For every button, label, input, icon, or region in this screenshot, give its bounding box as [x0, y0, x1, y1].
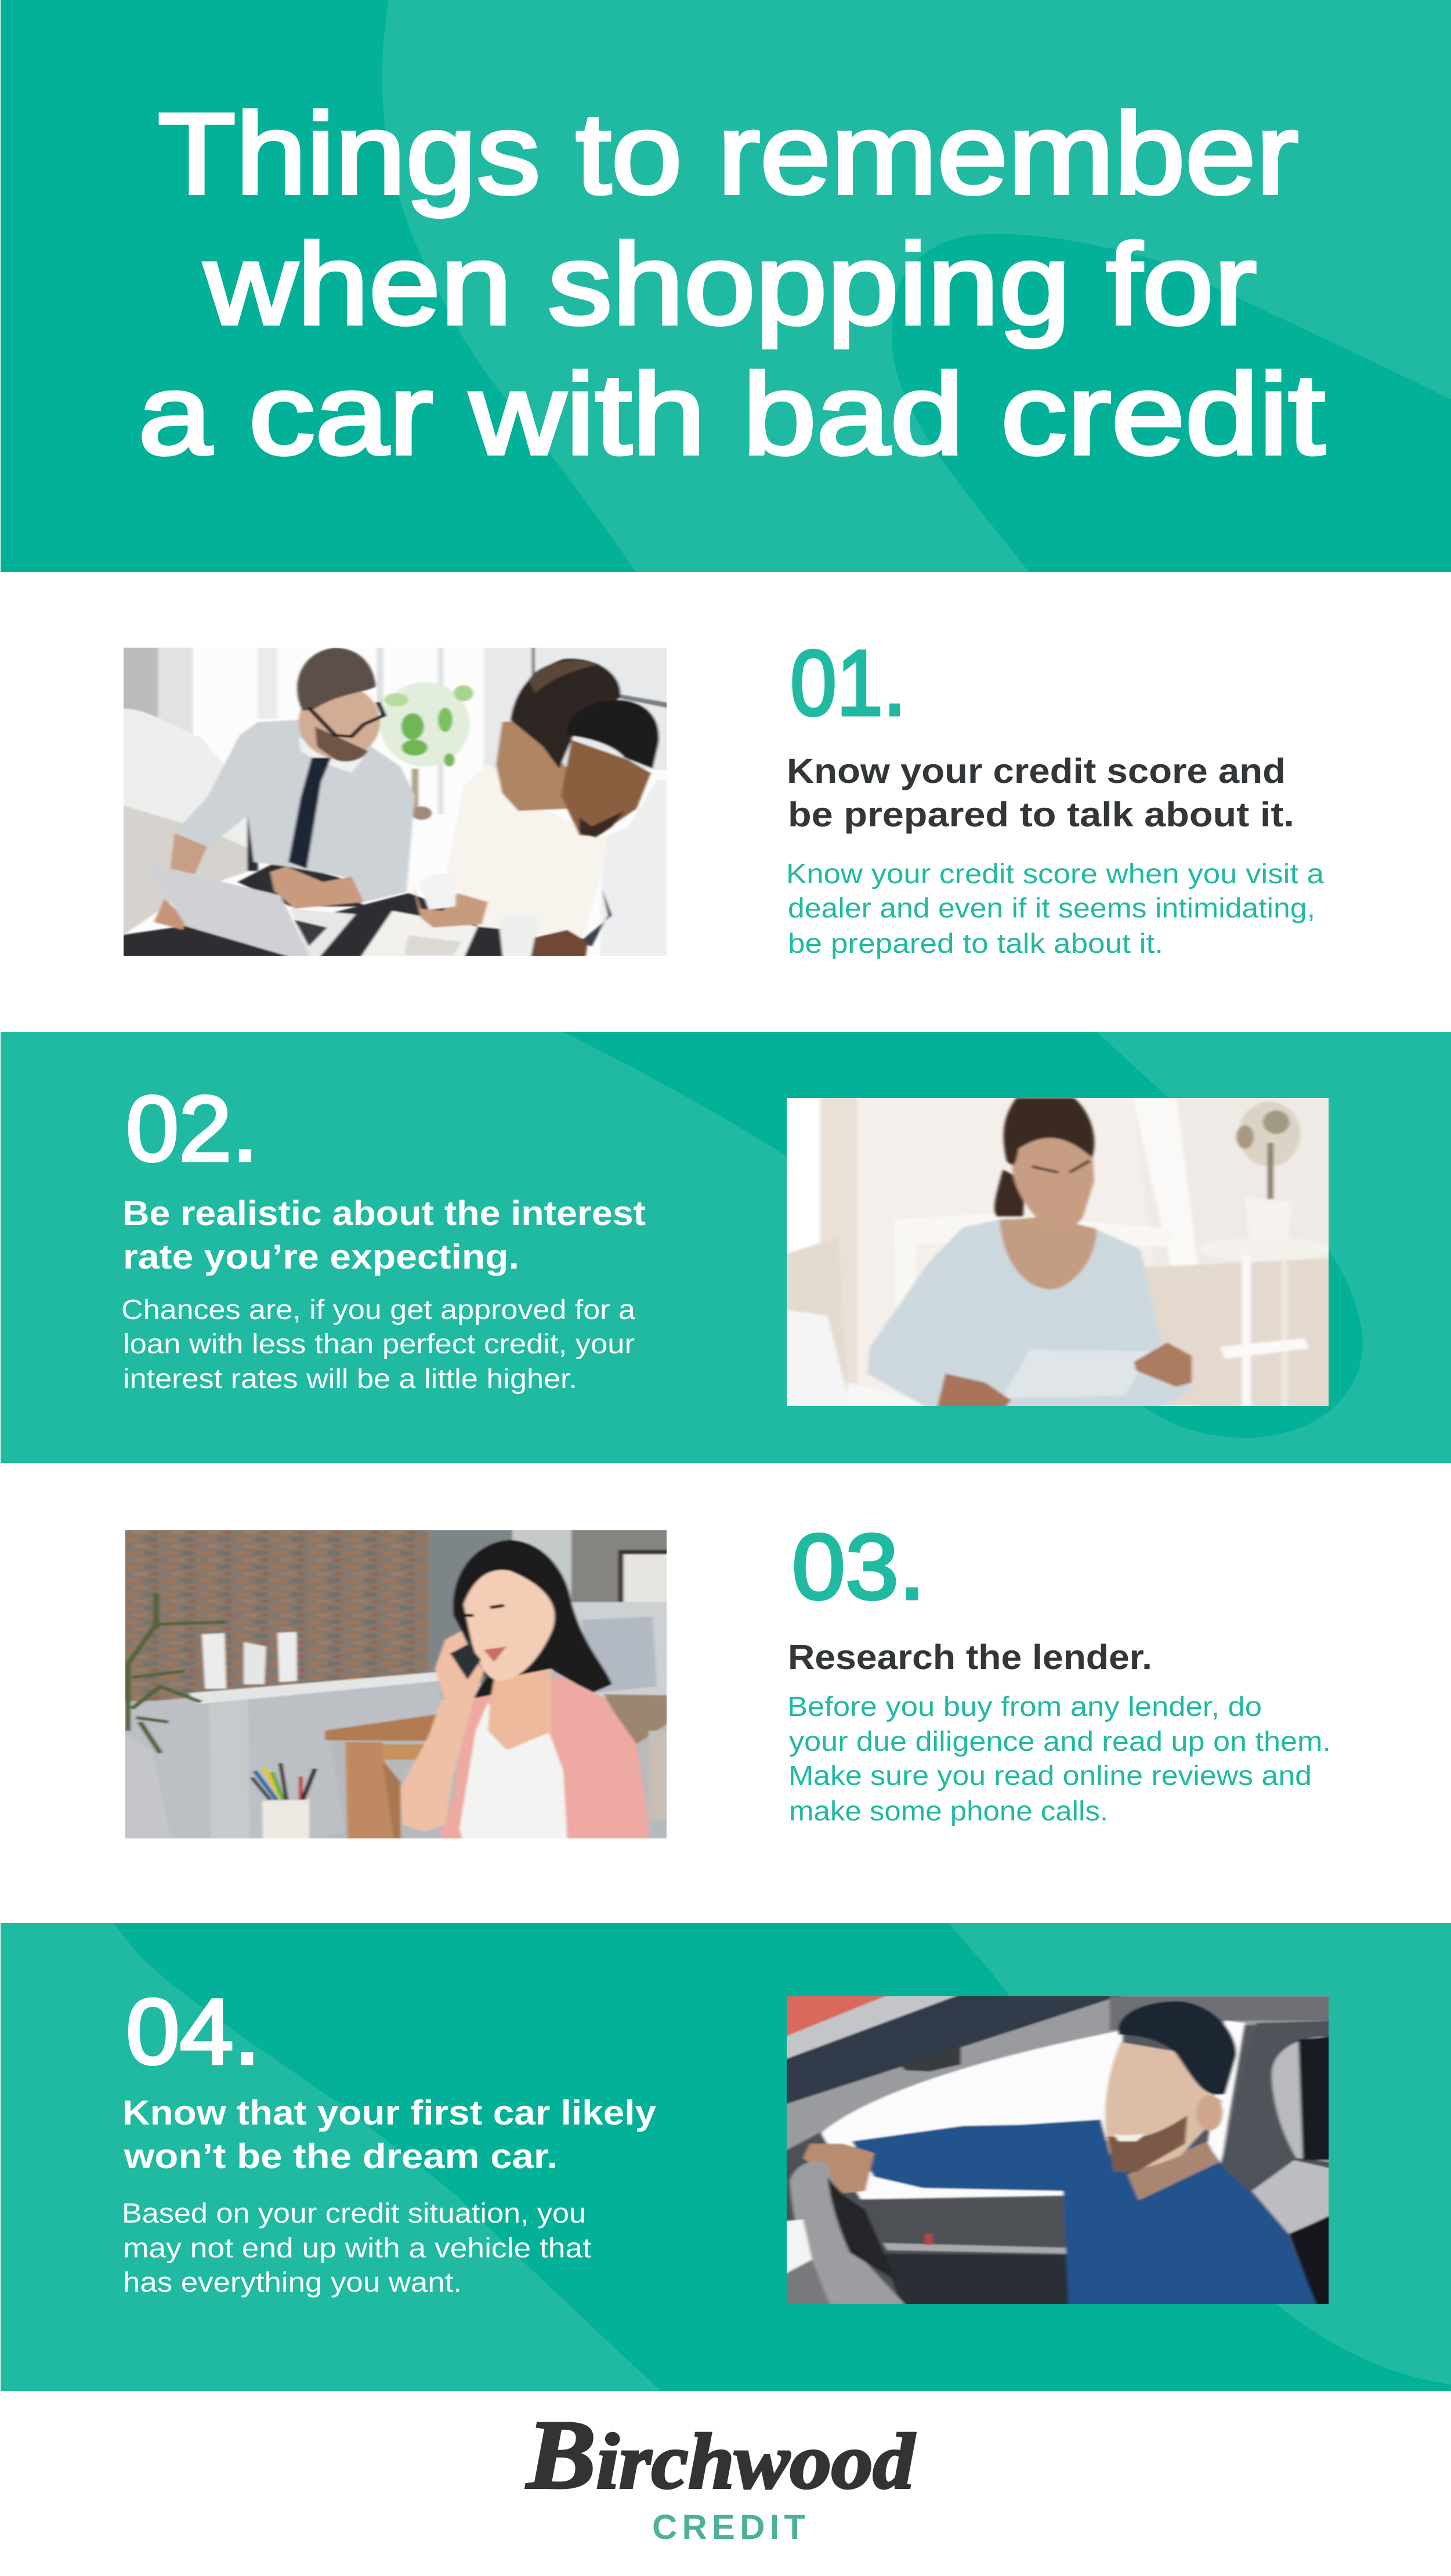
panel 02 text	[121, 1076, 646, 1394]
body 03: make some phone calls.	[789, 1796, 1108, 1827]
header panel	[1, 0, 1451, 572]
sofa	[120, 709, 250, 938]
title	[138, 89, 1325, 478]
number 02: 02.	[126, 1076, 258, 1180]
woman face	[496, 720, 567, 811]
panel 04 text	[122, 1979, 657, 2298]
chair	[126, 1735, 172, 1842]
face	[1105, 2042, 1223, 2169]
right wall	[1132, 1094, 1336, 1270]
body 02: interest rates will be a little higher.	[123, 1364, 577, 1394]
table	[120, 926, 299, 959]
hand	[803, 2144, 874, 2194]
shelf	[894, 1214, 1172, 1312]
panel 02	[1, 1032, 1451, 1463]
man right hair	[567, 700, 659, 769]
window	[821, 2030, 1123, 2199]
side table	[1199, 1238, 1331, 1261]
body 03: Before you buy from any lender, do	[787, 1692, 1262, 1722]
man right face	[561, 740, 651, 836]
heading 04	[122, 2093, 657, 2176]
grey wall	[429, 1527, 515, 1683]
pencil holder	[262, 1798, 309, 1842]
panel 04 background	[1, 1923, 1451, 2391]
plant	[128, 1593, 226, 1753]
photo: advisor with couple at laptop	[124, 648, 667, 956]
panel 04 right light swoosh	[949, 1923, 1451, 2384]
body 03	[787, 1692, 1331, 1827]
body 01: Know your credit score when you visit a	[786, 859, 1324, 890]
arm	[400, 1700, 473, 1832]
brick wall	[120, 1527, 429, 1701]
panel 01 background	[1, 572, 1451, 1032]
window frames	[258, 645, 277, 719]
hair	[1118, 2001, 1236, 2095]
hair	[1004, 1098, 1094, 1165]
woman sweater	[447, 764, 610, 938]
glasses	[309, 702, 384, 736]
woman hair	[511, 659, 621, 769]
face	[464, 1570, 555, 1681]
vases	[202, 1633, 226, 1689]
heading 04: won’t be the dream car.	[124, 2137, 558, 2176]
plant	[1239, 1101, 1301, 1166]
panel 02 dark swoosh	[563, 1032, 1363, 1438]
steering wheel	[790, 2161, 905, 2304]
neck	[488, 1669, 551, 1750]
window	[618, 1550, 671, 1639]
roof trim	[781, 1993, 1336, 2153]
photo: woman on the phone	[125, 1530, 667, 1838]
heading 02: rate you’re expecting.	[123, 1237, 519, 1276]
body 02: loan with less than perfect credit, your	[123, 1329, 635, 1360]
pencils	[252, 1777, 270, 1800]
panel 01	[1, 572, 1451, 1032]
man shirt	[172, 720, 415, 903]
body 04	[122, 2198, 591, 2298]
neckline skin	[1000, 1217, 1097, 1289]
body 01: be prepared to talk about it.	[788, 928, 1163, 959]
phone and hand	[435, 1631, 484, 1700]
papers	[360, 911, 477, 959]
white top	[459, 1702, 567, 1842]
heading 02: Be realistic about the interest	[122, 1194, 646, 1233]
ear	[1196, 2095, 1223, 2131]
logo wordmark: Birchwood	[526, 2400, 916, 2509]
panel 03 background	[1, 1463, 1451, 1923]
number 03: 03.	[792, 1515, 925, 1618]
panel 01 text	[786, 631, 1324, 959]
seat	[1207, 2021, 1245, 2167]
cardigan	[441, 1675, 649, 1842]
paper	[1002, 1350, 1149, 1398]
hands	[936, 1374, 1011, 1411]
body 04: Based on your credit situation, you	[122, 2198, 586, 2229]
title line 3: a car with bad credit	[138, 350, 1325, 478]
heading 01	[787, 752, 1294, 834]
man head	[299, 685, 380, 758]
hair back	[994, 1169, 1025, 1217]
panel 02 background	[1, 1032, 1451, 1463]
hair	[453, 1540, 612, 1700]
body 02: Chances are, if you get approved for a	[121, 1295, 635, 1325]
logo: Birchwood Credit	[526, 2400, 916, 2546]
plant	[380, 682, 469, 767]
body 03: your due diligence and read up on them.	[789, 1726, 1331, 1757]
man forearm and hands	[171, 833, 207, 874]
red car exterior	[781, 1993, 892, 2039]
neck	[1127, 2141, 1218, 2201]
number 04: 04.	[126, 1979, 260, 2083]
header light swoosh	[382, 0, 1451, 572]
pot	[1245, 1197, 1293, 1247]
chair	[247, 796, 258, 871]
panel 04 left light swoosh	[1, 1923, 661, 2391]
number 01: 01.	[790, 631, 906, 735]
mugs	[412, 884, 488, 927]
title line 1: Things to remember	[158, 89, 1298, 218]
heading 04: Know that your first car likely	[122, 2093, 657, 2132]
panel 04	[1, 1923, 1451, 2391]
body 01	[786, 859, 1324, 959]
heading 02	[122, 1194, 646, 1276]
woman's shirt	[867, 1218, 1192, 1411]
door	[781, 2134, 1068, 2304]
body 04: has everything you want.	[123, 2267, 462, 2298]
panel 03 text	[787, 1515, 1331, 1827]
sweater	[852, 2119, 1318, 2307]
logo tagline: CREDIT	[652, 2508, 805, 2546]
photo: man at steering wheel	[787, 1996, 1329, 2304]
heading 01: be prepared to talk about it.	[788, 795, 1294, 834]
body 01: dealer and even if it seems intimidating,	[788, 893, 1315, 924]
wood table	[325, 1714, 437, 1741]
heading 03: Research the lender.	[788, 1638, 1152, 1677]
laptop and desk	[781, 1309, 851, 1411]
dark pillar	[781, 1993, 1127, 2106]
title line 2: when shopping for	[204, 220, 1257, 348]
silver strip	[781, 1993, 963, 2061]
cabinets	[120, 1674, 439, 1842]
panel 03	[1, 1463, 1451, 1923]
body 03: Make sure you read online reviews and	[788, 1761, 1312, 1791]
photo: woman reading a letter	[787, 1098, 1329, 1406]
body 02	[121, 1295, 635, 1394]
face	[1012, 1125, 1094, 1229]
right wall	[484, 645, 671, 770]
window	[781, 1094, 820, 1254]
body 04: may not end up with a vehicle that	[123, 2233, 591, 2264]
left wall and curtain	[120, 645, 158, 721]
shirt right man	[600, 780, 673, 959]
laptop lid	[146, 864, 311, 958]
header dark inner swoosh	[892, 234, 1451, 572]
heading 01: Know your credit score and	[787, 752, 1286, 790]
mirror	[901, 2046, 961, 2072]
monitor	[571, 1602, 673, 1697]
tie	[288, 758, 331, 869]
